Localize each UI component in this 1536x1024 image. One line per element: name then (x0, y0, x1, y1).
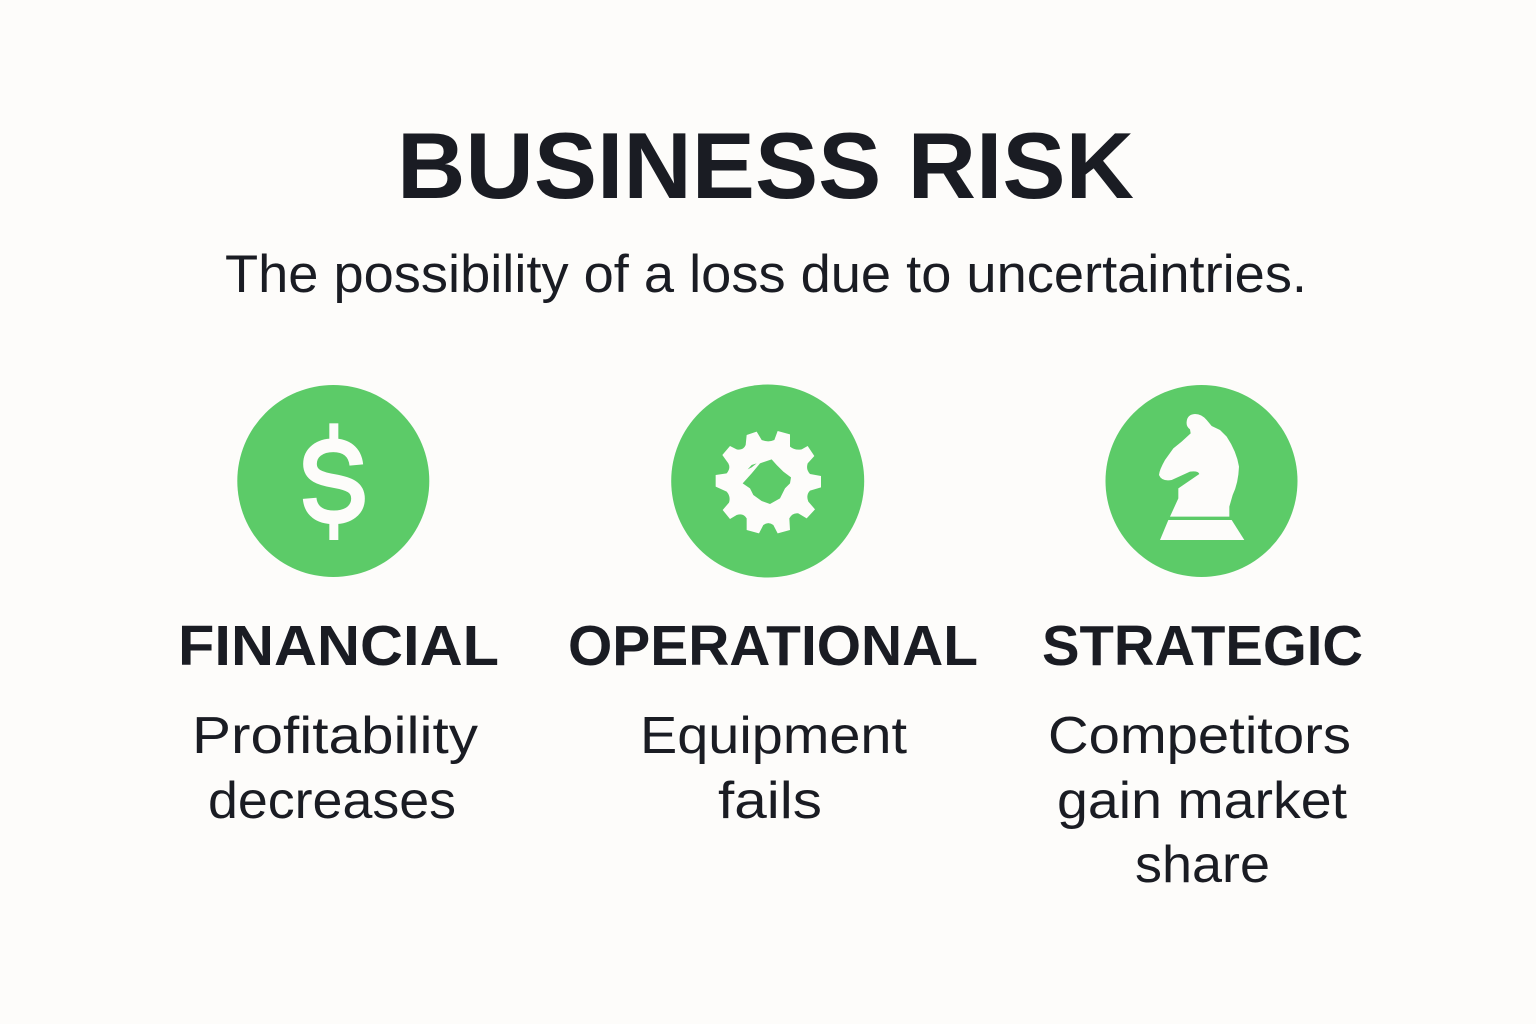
heading: strategic: STRATEGIC (1042, 614, 1363, 678)
text: financial description: Profitability (192, 707, 478, 765)
text: strategic description: Competitors (1048, 707, 1351, 765)
text: strategic description: share (1135, 836, 1270, 894)
title: BUSINESS RISK (397, 113, 1134, 218)
icon: gear (671, 384, 864, 578)
panel: financial (178, 385, 499, 830)
text: operational description (640, 707, 908, 830)
text: operational description: Equipment (640, 707, 908, 765)
heading: operational: OPERATIONAL (568, 614, 978, 678)
panel: operational (568, 384, 978, 830)
icon: chess knight (1106, 385, 1298, 577)
text: financial description: decreases (208, 772, 456, 830)
text: operational description: fails (718, 772, 822, 830)
text: strategic description: gain market (1057, 772, 1348, 830)
heading: financial: FINANCIAL (178, 614, 499, 678)
text: financial description (192, 707, 478, 830)
subtitle: The possibility of a loss due to uncertaintries. (225, 245, 1307, 304)
icon: dollar sign (237, 385, 429, 577)
text: strategic description (1048, 707, 1351, 894)
panel: strategic (1042, 385, 1363, 894)
